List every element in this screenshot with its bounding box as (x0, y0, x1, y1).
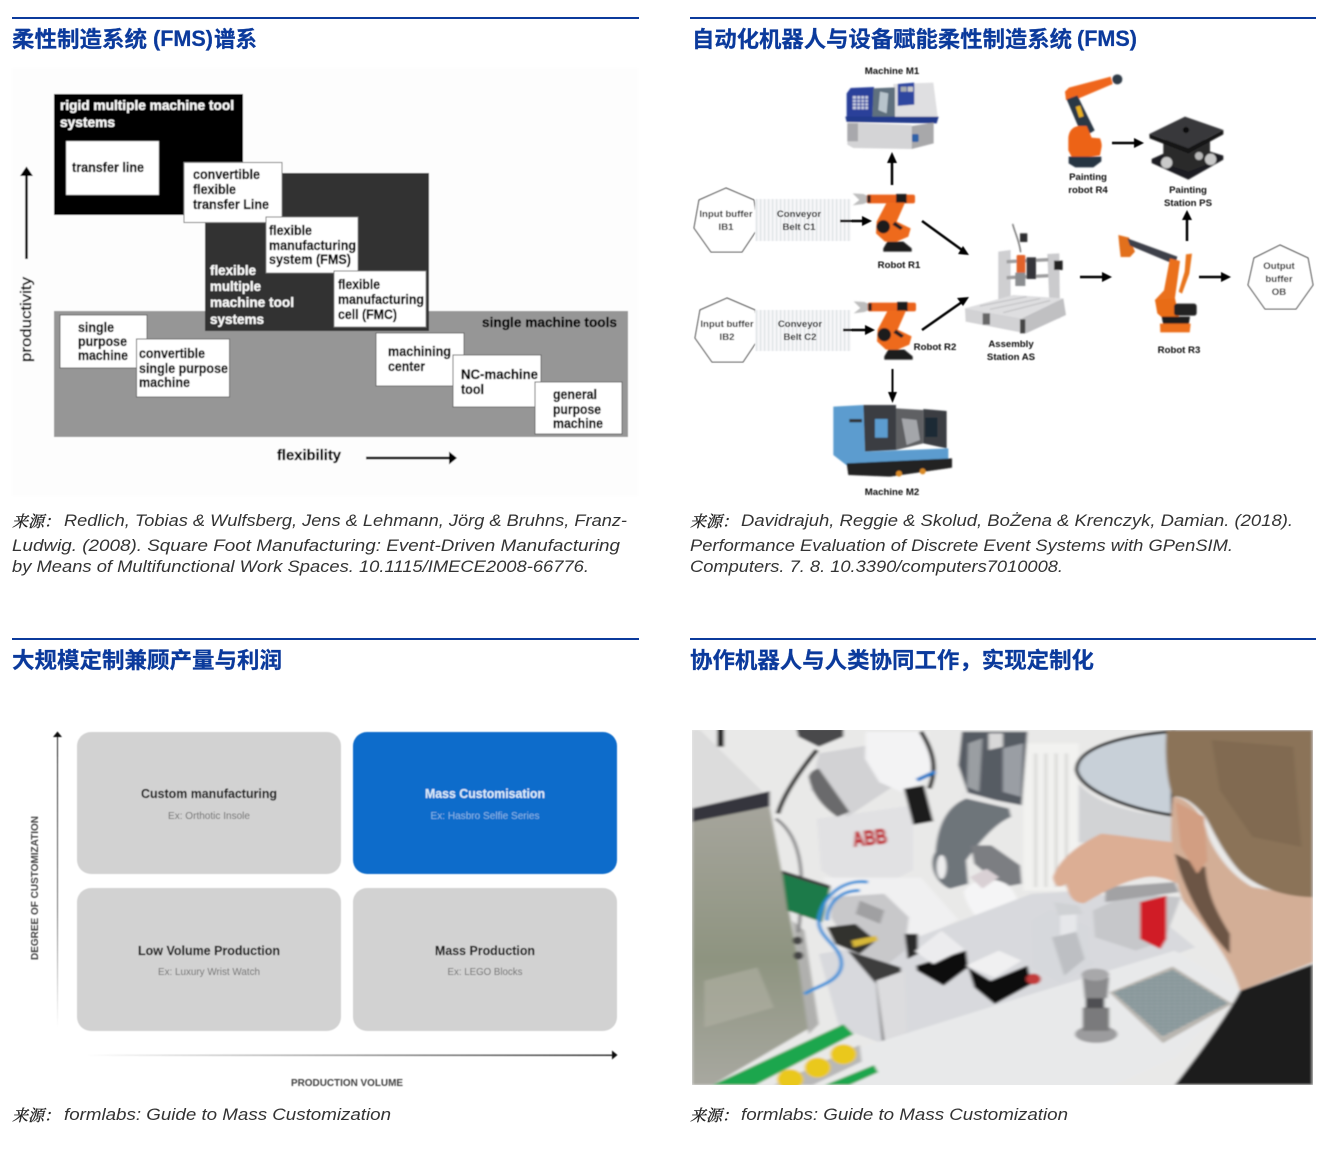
source caption: Redlich et al.: by Means of Multifunctional Work Spaces. 10.1115/IMECE2008-66776. (12, 557, 589, 576)
label: painting station (1164, 185, 1213, 209)
heading: automation robots: 自动化机器人与设备赋能柔性制造系统 (692, 27, 1072, 52)
axis: degree of customization (29, 732, 62, 1027)
matrix chart (29, 732, 618, 1089)
box: transfer line (66, 141, 159, 195)
block: flexible multiple machine tool systems: systems (210, 312, 264, 327)
panel: mass customization (12, 638, 639, 1126)
box: single purpose machine: machine (78, 348, 128, 363)
input buffer IB2 (695, 298, 759, 362)
source caption: formlabs: formlabs: Guide to Mass Customization (741, 1105, 1068, 1124)
label: robot R3: Robot R3 (1158, 345, 1200, 356)
block: single machine tools: single machine tools (482, 315, 617, 330)
quadrant: custom manufacturing: Custom manufacturing (141, 787, 277, 801)
box: convertible single purpose machine: single purpose (139, 361, 228, 376)
box: flexible manufacturing system (266, 217, 358, 273)
aluminium parts (1032, 911, 1095, 982)
source caption: Davidrajuh et al.: 来源： (690, 509, 738, 532)
box: convertible flexible transfer line: transfer Line (193, 197, 269, 212)
panel: collaborative robots (688, 638, 1318, 1126)
quadrant: mass production: Ex: LEGO Blocks (448, 967, 522, 978)
block: flexible multiple machine tool systems: multiple (210, 279, 261, 294)
diagram: FMS layout: Robot R2 (914, 342, 956, 353)
label: machine M1: Machine M1 (865, 66, 920, 77)
icon: machine M1 (845, 83, 939, 149)
input buffer IB1: IB1 (719, 222, 734, 233)
block: flexible multiple machine tool systems (205, 173, 429, 331)
icon: machine M2 (833, 405, 952, 477)
box: general purpose machine (535, 382, 622, 434)
left metal block (847, 951, 907, 1041)
block: rigid multiple machine tool systems (54, 94, 243, 215)
box: convertible single purpose machine (136, 339, 230, 397)
box: convertible single purpose machine: machine (139, 375, 190, 390)
label: painting robot R4: robot R4 (1068, 185, 1108, 196)
source caption: Davidrajuh et al. (690, 509, 1293, 576)
icon: painting station (1149, 117, 1223, 180)
gray cable (776, 819, 802, 932)
quadrant: custom manufacturing: Ex: Orthotic Insole (168, 811, 250, 822)
cables (778, 750, 817, 814)
bench (819, 890, 1195, 1044)
source caption: formlabs (690, 1103, 1068, 1126)
quadrant: mass production (353, 888, 617, 1031)
steel box (692, 807, 811, 1085)
box: flexible manufacturing cell (334, 271, 426, 327)
metal post (1075, 1025, 1117, 1043)
heading: FMS spectrum (12, 26, 257, 52)
output buffer OB (1248, 245, 1313, 309)
box: single purpose machine: single (78, 320, 114, 335)
source caption: Davidrajuh et al.: Computers. 7. 8. 10.3390/computers7010008. (690, 557, 1063, 576)
input buffer IB1 (694, 188, 758, 252)
chart: productivity versus flexibility (12, 68, 638, 496)
box: NC-machine tool: tool (461, 382, 484, 397)
box: flexible manufacturing cell: manufacturing (338, 292, 424, 307)
axis: productivity: productivity (18, 276, 35, 362)
source caption: Redlich et al.: Redlich, Tobias & Wulfsberg, Jens & Lehmann, Jörg & Bruhns, Franz- (64, 511, 627, 530)
front table (856, 951, 1240, 1085)
label: assembly station (987, 339, 1036, 363)
diagram: FMS layout (694, 66, 1313, 498)
conveyor belt C2: Conveyor (778, 319, 822, 330)
box: general purpose machine: purpose (553, 402, 601, 417)
conveyor belt C1: Conveyor (777, 209, 821, 220)
source caption: formlabs: 来源： (690, 1103, 738, 1126)
heading: FMS spectrum: 谱系 (214, 27, 257, 52)
output buffer OB: Output (1263, 261, 1296, 272)
black fixtures (916, 951, 968, 986)
box: transfer line: transfer line (72, 160, 144, 175)
block: flexible multiple machine tool systems: flexible (210, 263, 256, 278)
box: flexible manufacturing system: system (FMS) (269, 252, 351, 267)
box: convertible flexible transfer line: convertible (193, 167, 260, 182)
input buffer IB2: Input buffer (700, 319, 754, 330)
quadrant: low volume production: Ex: Luxury Wrist Watch (158, 967, 260, 978)
output buffer OB: buffer (1265, 274, 1293, 285)
axis: production volume (85, 1050, 618, 1089)
photo: worker with ABB robot (688, 727, 1318, 1089)
label: painting robot R4 (1068, 172, 1108, 196)
heading: automation robots: (FMS) (1077, 26, 1137, 51)
worker hair (1166, 730, 1313, 897)
section rule (690, 638, 1316, 640)
box: single purpose machine (60, 315, 147, 368)
box: single purpose machine: purpose (78, 334, 127, 349)
block: flexible multiple machine tool systems: machine tool (210, 295, 294, 310)
green holder with yellow parts (712, 1024, 854, 1085)
conveyor belt C2 (755, 310, 851, 351)
blue pneumatic hoses (804, 882, 868, 994)
axis: production volume: PRODUCTION VOLUME (291, 1077, 403, 1089)
box: flexible manufacturing cell: flexible (338, 277, 380, 292)
quadrant: mass production: Mass Production (435, 944, 535, 958)
panel: automation robots enabling FMS (690, 17, 1316, 576)
section rule (690, 17, 1316, 19)
quadrant: low volume production: Low Volume Production (138, 944, 280, 958)
input buffer IB1: Input buffer (699, 209, 753, 220)
axis: flexibility: flexibility (277, 448, 341, 464)
input buffer IB2: IB2 (720, 332, 734, 343)
source caption: Redlich et al.: 来源： (12, 509, 60, 532)
box: flexible manufacturing system: manufacturing (269, 238, 356, 253)
output buffer OB: OB (1272, 287, 1286, 298)
quadrant: low volume production (77, 888, 341, 1031)
ABB logo: ABB (851, 824, 889, 851)
icon: robot R3 (1118, 235, 1197, 332)
radiator (1023, 743, 1079, 890)
label: machine M2: Machine M2 (865, 487, 919, 498)
source caption: Davidrajuh et al.: Davidrajuh, Reggie & Skolud, BoŻena & Krenczyk, Damian. (2018). (741, 511, 1293, 530)
bin (1079, 783, 1173, 850)
source caption: formlabs: 来源： (12, 1103, 60, 1126)
conveyor belt C1 (755, 199, 851, 241)
section rule (12, 17, 639, 19)
box: convertible single purpose machine: convertible (139, 346, 205, 361)
box: NC-machine tool: NC-machine (461, 367, 538, 382)
panel: FMS spectrum (12, 17, 639, 576)
arrows: material flow (840, 138, 1231, 403)
box: NC-machine tool (453, 355, 541, 407)
quadrant: mass customisation: Mass Customisation (425, 787, 545, 801)
label: assembly station: Assembly (988, 339, 1034, 350)
source caption: Davidrajuh et al.: Performance Evaluation of Discrete Event Systems with GPenSIM. (690, 536, 1233, 555)
label: painting station: Station PS (1164, 198, 1213, 209)
block: single machine tools (54, 311, 628, 437)
box: flexible manufacturing system: flexible (269, 223, 312, 238)
source caption: formlabs: formlabs: Guide to Mass Customization (64, 1105, 391, 1124)
conveyor belt C2: Belt C2 (783, 332, 817, 343)
worker shirt (1175, 964, 1313, 1085)
box: machining center: machining (388, 344, 451, 359)
quadrant: mass customisation: Ex: Hasbro Selfie Series (430, 811, 540, 822)
box: general purpose machine: machine (553, 416, 603, 431)
heading: FMS spectrum: (FMS) (153, 26, 213, 51)
box: general purpose machine: general (553, 387, 597, 402)
box: machining center: center (388, 359, 426, 374)
heading: collaborative robots: 协作机器人与人类协同工作，实现定制化 (690, 647, 1094, 673)
label: assembly station: Station AS (987, 352, 1036, 363)
heading: FMS spectrum: 柔性制造系统 (12, 27, 147, 52)
quadrant: custom manufacturing (77, 732, 341, 874)
screw tray (1109, 966, 1232, 1043)
worker neck and face (1171, 797, 1313, 991)
diagram: FMS layout: Robot R1 (878, 260, 921, 271)
heading: mass customization: 大规模定制兼顾产量与利润 (12, 648, 282, 673)
axis: productivity (18, 166, 35, 362)
gripper unit (831, 894, 909, 971)
source caption: Redlich et al. (12, 509, 627, 576)
conveyor belt C1: Belt C1 (782, 222, 816, 233)
box: convertible flexible transfer line (184, 162, 282, 222)
section rule (12, 638, 639, 640)
green rail (782, 872, 830, 922)
source caption: Redlich et al.: Ludwig. (2008). Square Foot Manufacturing: Event-Driven Manufacturing (12, 536, 621, 555)
icon: robot R4 (1065, 74, 1122, 167)
icon: assembly station (965, 224, 1066, 333)
icon: robot R2 (854, 301, 916, 360)
box: convertible flexible transfer line: flexible (193, 182, 236, 197)
icon: robot R1 (853, 193, 915, 252)
worker hand (1053, 834, 1177, 903)
block: rigid multiple machine tool systems: systems (60, 115, 115, 130)
block: rigid multiple machine tool systems: rigid multiple machine tool (60, 98, 234, 113)
axis: degree of customization: DEGREE OF CUSTOMIZATION (29, 816, 41, 960)
box: flexible manufacturing cell: cell (FMC) (338, 307, 397, 322)
label: painting robot R4: Painting (1069, 172, 1107, 183)
quadrant: mass customisation (353, 732, 617, 874)
source caption: formlabs (12, 1103, 391, 1126)
robot arm (958, 732, 1027, 805)
axis: flexibility (277, 448, 457, 464)
box: machining center (376, 333, 464, 386)
label: painting station: Painting (1169, 185, 1207, 196)
robot body (817, 805, 913, 880)
